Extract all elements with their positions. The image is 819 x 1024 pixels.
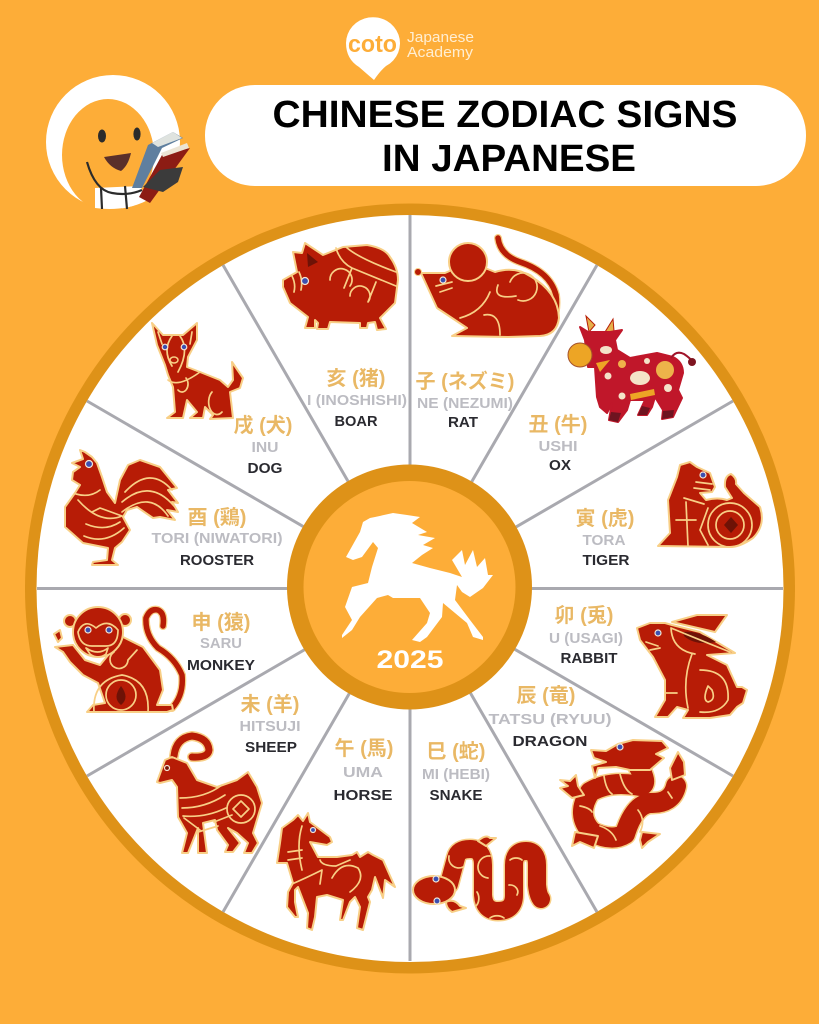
label: sheep: HITSUJI <box>240 719 300 735</box>
label: dog: DOG <box>248 461 282 477</box>
label: ox: USHI <box>538 439 578 455</box>
label: dog: 戌 (犬) <box>234 414 292 437</box>
label: rabbit <box>549 604 623 667</box>
label: rabbit: U (USAGI) <box>549 631 623 647</box>
label: rooster: ROOSTER <box>180 553 255 569</box>
logo: Coto Japanese Academy: coto <box>348 31 397 58</box>
label: sheep <box>240 693 300 756</box>
title banner: IN JAPANESE <box>382 138 636 180</box>
icon: sheep <box>157 736 262 853</box>
label: dragon: DRAGON <box>512 734 588 750</box>
label: rat: RAT <box>448 415 478 431</box>
icon: monkey <box>54 607 182 712</box>
label: sheep: 未 (羊) <box>241 693 299 716</box>
label: tiger <box>576 507 634 569</box>
label: horse: UMA <box>343 765 384 781</box>
logo: Coto Japanese Academy: Academy <box>407 45 474 61</box>
year label: 2025 <box>376 646 444 674</box>
label: tiger: TIGER <box>582 553 630 569</box>
centre medallion: 2025 horse <box>287 464 532 710</box>
label: sheep: SHEEP <box>245 740 297 756</box>
icon: rabbit <box>637 615 747 718</box>
label: boar: 亥 (猪) <box>327 367 385 390</box>
label: monkey: SARU <box>200 636 242 652</box>
label: rabbit: 卯 (兎) <box>555 604 613 627</box>
label: dragon: TATSU (RYUU) <box>488 712 612 728</box>
label: snake: SNAKE <box>430 788 483 804</box>
label: monkey: 申 (猿) <box>192 611 250 634</box>
label: dog: INU <box>252 440 278 456</box>
title banner <box>205 85 806 186</box>
label: rat: 子 (ネズミ) <box>416 369 514 393</box>
label: dragon: 辰 (竜) <box>517 684 575 707</box>
label: tiger: 寅 (虎) <box>576 507 634 530</box>
label: rooster <box>152 506 283 569</box>
icon: rat <box>414 238 559 337</box>
label: rooster: TORI (NIWATORI) <box>152 531 283 547</box>
label: rat <box>416 369 514 431</box>
logo: Coto Japanese Academy <box>346 17 474 80</box>
label: horse <box>334 737 393 804</box>
label: boar: I (INOSHISHI) <box>307 393 407 409</box>
label: horse: HORSE <box>334 788 393 804</box>
label: snake: 巳 (蛇) <box>427 740 485 763</box>
icon: boar <box>283 243 398 330</box>
label: rat: NE (NEZUMI) <box>417 396 513 412</box>
icon: dragon <box>560 740 685 848</box>
label: ox <box>529 413 587 474</box>
icon: ox <box>568 316 696 422</box>
label: horse: 午 (馬) <box>335 737 393 760</box>
icon: dog <box>152 323 243 419</box>
label: snake <box>422 740 490 804</box>
label: dog <box>234 414 292 477</box>
icon: rooster <box>65 450 178 565</box>
label: dragon <box>488 684 612 750</box>
icon: tiger <box>658 462 762 547</box>
title banner: CHINESE ZODIAC SIGNS <box>272 94 738 136</box>
label: rabbit: RABBIT <box>560 651 618 667</box>
label: monkey <box>187 611 255 674</box>
mascot with books <box>46 75 190 211</box>
zodiac wheel base <box>25 204 795 974</box>
label: monkey: MONKEY <box>187 658 255 674</box>
label: boar <box>307 367 407 430</box>
icon: snake <box>413 837 541 918</box>
label: tiger: TORA <box>582 533 626 549</box>
label: boar: BOAR <box>334 414 378 430</box>
label: ox: OX <box>549 458 571 474</box>
label: rooster: 酉 (鶏) <box>188 506 246 529</box>
label: ox: 丑 (牛) <box>529 413 587 436</box>
logo: Coto Japanese Academy: Japanese <box>407 30 474 46</box>
icon: white horse with flaming mane <box>342 513 493 642</box>
label: snake: MI (HEBI) <box>422 767 490 783</box>
icon: horse <box>277 813 395 930</box>
